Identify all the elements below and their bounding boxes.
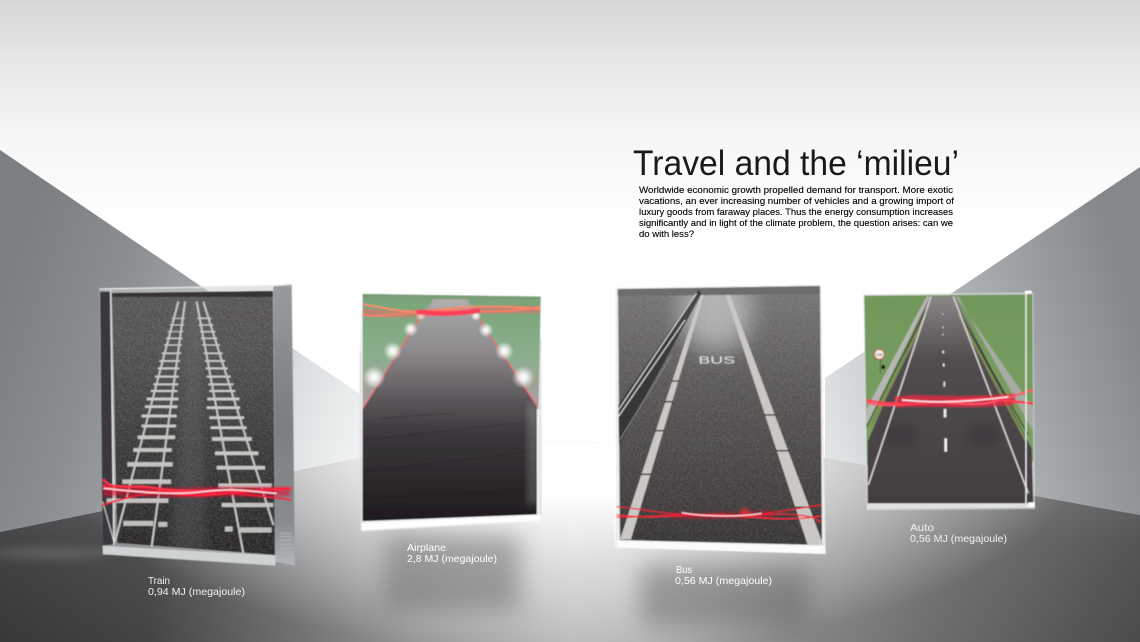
label: airplane: 2,8 MJ (megajoule) [407, 554, 497, 565]
bus road photo [618, 286, 822, 545]
right wall [825, 167, 1140, 515]
label: train: 0,94 MJ (megajoule) [148, 587, 245, 598]
train photo [112, 291, 275, 555]
auto guardrails [867, 297, 1033, 440]
intro text: significantly and in light of the climate problem, the question arises: can we [639, 218, 953, 229]
label: train [148, 576, 245, 598]
panel: bus block [615, 272, 826, 554]
airplane base plate [361, 515, 541, 531]
bus lane lines [620, 295, 704, 539]
auto speed sign: 100 [876, 352, 883, 357]
bus glass body [615, 285, 826, 554]
airplane runway [363, 298, 537, 521]
bus base plate [617, 541, 826, 554]
auto speed sign [874, 349, 885, 373]
label: auto: 0,56 MJ (megajoule) [910, 534, 1007, 545]
auto glass body [863, 292, 1035, 510]
label: train: Train [148, 576, 170, 587]
label: auto [910, 523, 1007, 545]
bus guardrail [618, 290, 702, 445]
airplane energy laser [363, 304, 540, 316]
bus road marking: BUS [698, 355, 736, 366]
auto grass [864, 294, 1033, 465]
floor [0, 440, 1140, 642]
panel: airplane block [359, 294, 542, 531]
train tracks [103, 290, 293, 553]
intro text: do with less? [639, 229, 694, 240]
panel: train block [99, 284, 295, 566]
auto road [868, 297, 1033, 503]
airplane grass [363, 294, 541, 409]
airplane glass glow [359, 294, 542, 522]
airplane runway lights [363, 310, 535, 389]
bus energy laser [617, 505, 822, 522]
label: bus: 0,56 MJ (megajoule) [675, 576, 772, 587]
label: airplane [407, 543, 497, 565]
intro text [639, 185, 954, 240]
intro text: vacations, an ever increasing number of vehicles and a growing import of [639, 196, 954, 207]
auto lane markings [868, 297, 1028, 493]
title: Travel and the ‘milieu’ [633, 144, 959, 183]
left wall [0, 150, 360, 532]
intro text: luxury goods from faraway places. Thus the energy consumption increases [639, 207, 953, 218]
train energy laser [103, 479, 292, 505]
label: airplane: Airplane [407, 543, 446, 554]
auto base plate and edge [867, 503, 1033, 509]
train glass body [99, 284, 295, 566]
label: bus: Bus [676, 565, 692, 576]
label: auto: Auto [910, 523, 934, 534]
panel: auto block [863, 291, 1035, 510]
auto energy laser [867, 390, 1033, 405]
intro text: Worldwide economic growth propelled demand for transport. More exotic [639, 185, 953, 196]
label: bus [675, 565, 772, 587]
